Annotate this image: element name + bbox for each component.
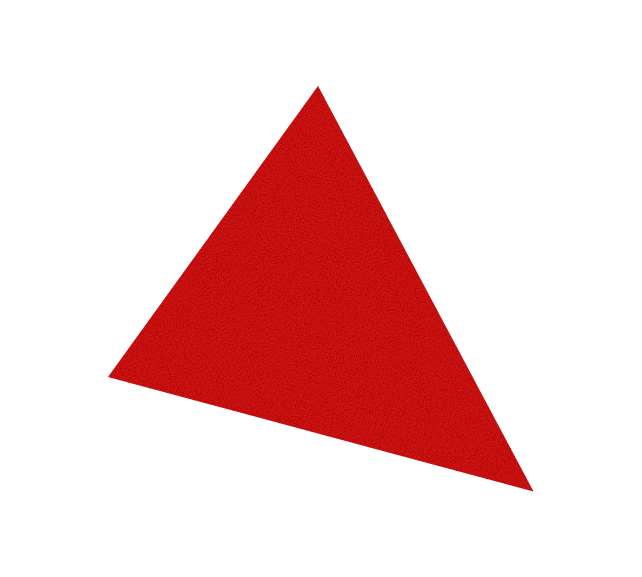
triangle: [100, 80, 540, 500]
graphic: red textured triangle: [108, 86, 534, 492]
